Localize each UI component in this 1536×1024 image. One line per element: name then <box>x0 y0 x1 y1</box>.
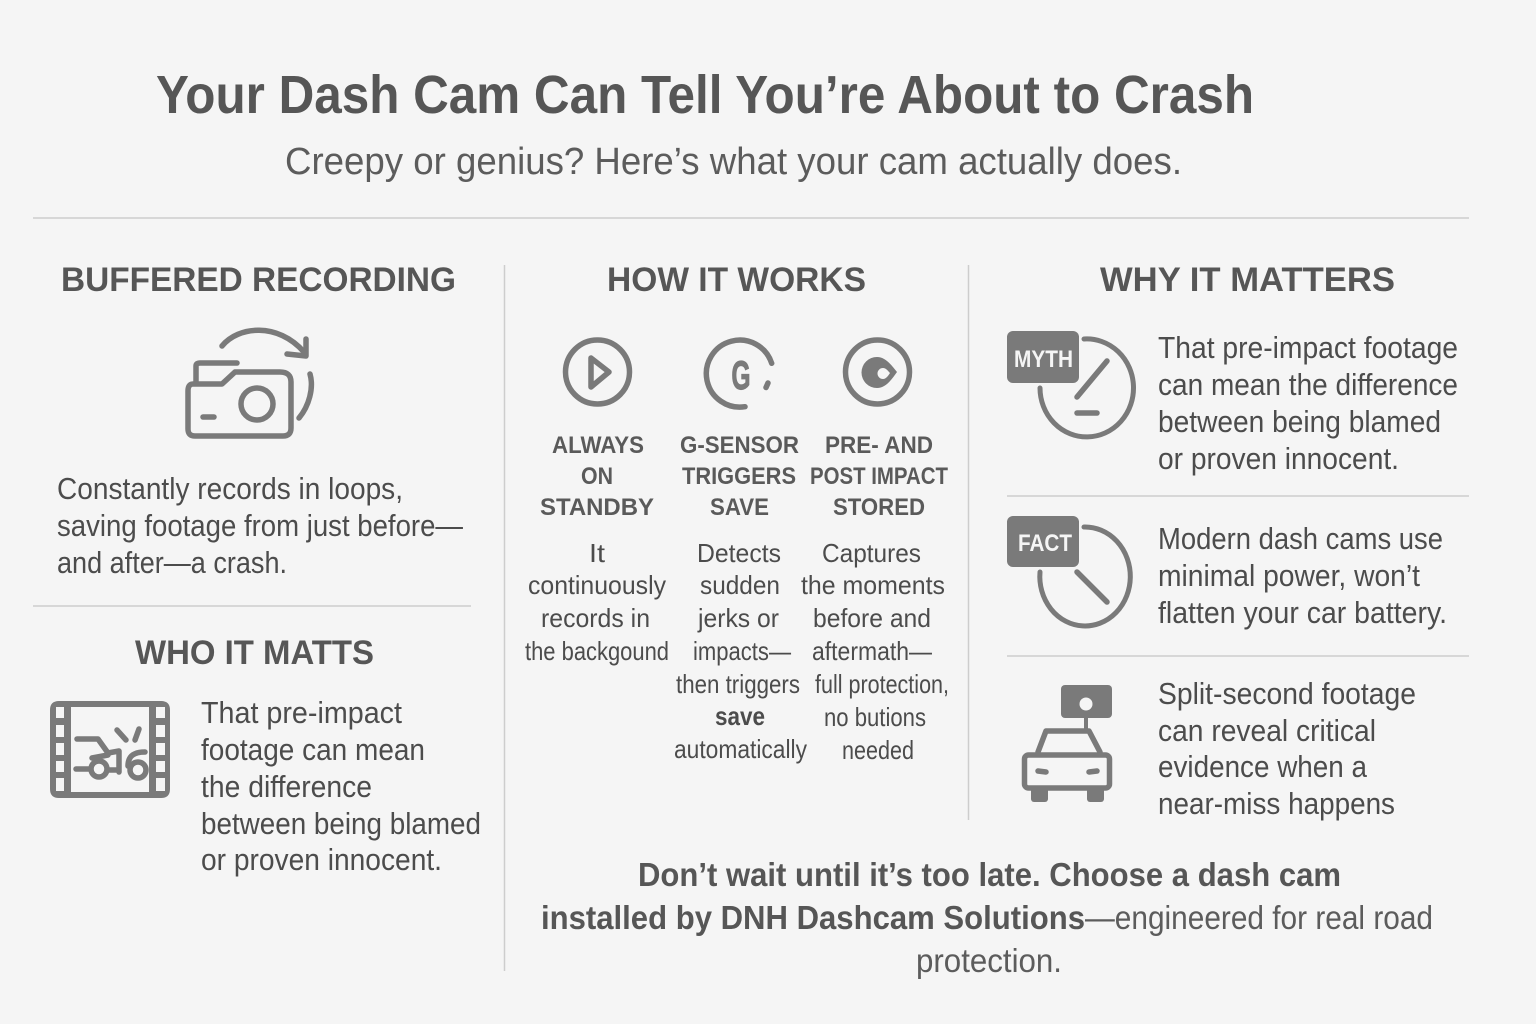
call to action: installed by DNH Dashcam Solutions <box>541 899 1085 936</box>
label: always on standby: STANDBY <box>540 494 654 521</box>
heading: buffered recording: BUFFERED RECORDING <box>61 261 456 299</box>
text: pre- and post impact description: Captures <box>822 538 921 568</box>
text: who it matts description <box>201 695 481 877</box>
call to action: Don’t wait until it’s too late. Choose a dash cam <box>638 856 1341 893</box>
label: g-sensor triggers save <box>680 432 799 521</box>
text: buffered recording description: saving footage from just before— <box>57 508 463 543</box>
call to action: protection. <box>916 942 1062 979</box>
text: pre- and post impact description: no butions <box>824 702 926 732</box>
text: fact description: minimal power, won’t <box>1158 558 1420 593</box>
text: myth description: or proven innocent. <box>1158 441 1399 476</box>
text: who it matts description: or proven innocent. <box>201 842 442 877</box>
text: pre- and post impact description: needed <box>842 735 914 765</box>
text: myth description <box>1158 330 1458 476</box>
step: always on standby <box>525 340 669 666</box>
text: g-sensor description <box>674 538 807 764</box>
text: g-sensor description: automatically <box>674 734 807 764</box>
text: always on standby description: It <box>589 538 606 568</box>
label: pre- and post impact stored: POST IMPACT <box>810 463 948 490</box>
text: g-sensor description: jerks or <box>697 603 779 633</box>
label: pre- and post impact stored <box>810 432 948 521</box>
text: myth description: That pre-impact footage <box>1158 330 1458 365</box>
text: near-miss description: near-miss happens <box>1158 786 1395 821</box>
icon: fact clock: FACT <box>1018 530 1072 557</box>
step: g-sensor triggers save <box>674 340 807 764</box>
text: pre- and post impact description: before and <box>813 603 931 633</box>
label: g-sensor triggers save: G-SENSOR <box>680 432 799 459</box>
text: who it matts description: the difference <box>201 769 372 804</box>
text: myth description: can mean the difference <box>1158 367 1458 402</box>
text: fact description <box>1158 521 1447 630</box>
text: buffered recording description: and after—a crash. <box>57 545 287 580</box>
panel: how it works <box>525 261 949 765</box>
icon: myth clock <box>1007 331 1133 437</box>
text: myth description: between being blamed <box>1158 404 1441 439</box>
text: near-miss description: Split-second footage <box>1158 676 1416 711</box>
text: near-miss description: evidence when a <box>1158 749 1368 784</box>
icon: play <box>566 340 630 404</box>
text: pre- and post impact description <box>801 538 949 765</box>
label: always on standby: ALWAYS <box>552 432 644 459</box>
panel: buffered recording <box>57 261 463 580</box>
label: g-sensor triggers save: SAVE <box>710 494 769 521</box>
text: who it matts description: That pre-impact <box>201 695 402 730</box>
text: buffered recording description <box>57 471 463 580</box>
text: g-sensor description: Detects <box>697 538 781 568</box>
text: always on standby description <box>525 538 669 666</box>
text: always on standby description: continuously <box>528 570 666 600</box>
panel: why it matters <box>1007 261 1458 821</box>
icon: g-sensor: G <box>732 354 750 398</box>
label: always on standby <box>540 432 654 521</box>
text: always on standby description: records in <box>541 603 650 633</box>
heading: who it matts: WHO IT MATTS <box>135 634 374 672</box>
call to action: —engineered for real road <box>1085 899 1433 936</box>
label: always on standby: ON <box>581 463 613 490</box>
icon: looping camera <box>188 330 311 436</box>
text: g-sensor description: save <box>715 701 765 731</box>
text: pre- and post impact description: aftermath— <box>812 636 932 666</box>
text: near-miss description <box>1158 676 1416 821</box>
text: near-miss description: can reveal critical <box>1158 713 1376 748</box>
text: g-sensor description: impacts— <box>693 636 791 666</box>
text: who it matts description: footage can mean <box>201 732 425 767</box>
icon: fact clock <box>1007 516 1130 626</box>
icon: myth clock: MYTH <box>1014 346 1073 373</box>
icon: film strip with car crash <box>50 701 170 798</box>
text: pre- and post impact description: the moments <box>801 570 945 600</box>
icon: g-sensor <box>706 340 772 407</box>
label: g-sensor triggers save: TRIGGERS <box>682 463 796 490</box>
title: Your Dash Cam Can Tell You’re About to Crash <box>156 65 1254 125</box>
step: pre- and post-impact stored <box>801 340 949 765</box>
text: buffered recording description: Constantly records in loops, <box>57 471 403 506</box>
text: g-sensor description: then triggers <box>676 669 800 699</box>
heading: why it matters: WHY IT MATTERS <box>1100 261 1395 299</box>
call to action <box>541 856 1433 979</box>
icon: record <box>846 340 910 404</box>
text: always on standby description: the backgound <box>525 636 669 666</box>
panel: who it matts <box>50 634 481 877</box>
label: pre- and post impact stored: PRE- AND <box>825 432 933 459</box>
subtitle: Creepy or genius? Here’s what your cam actually does. <box>285 141 1182 183</box>
text: pre- and post impact description: full protection, <box>815 669 949 699</box>
text: who it matts description: between being blamed <box>201 806 481 841</box>
icon: car with camera sign <box>1024 685 1112 802</box>
heading: how it works: HOW IT WORKS <box>607 261 866 299</box>
label: pre- and post impact stored: STORED <box>833 494 925 521</box>
text: fact description: flatten your car battery. <box>1158 595 1447 630</box>
text: fact description: Modern dash cams use <box>1158 521 1443 556</box>
text: g-sensor description: sudden <box>700 570 780 600</box>
